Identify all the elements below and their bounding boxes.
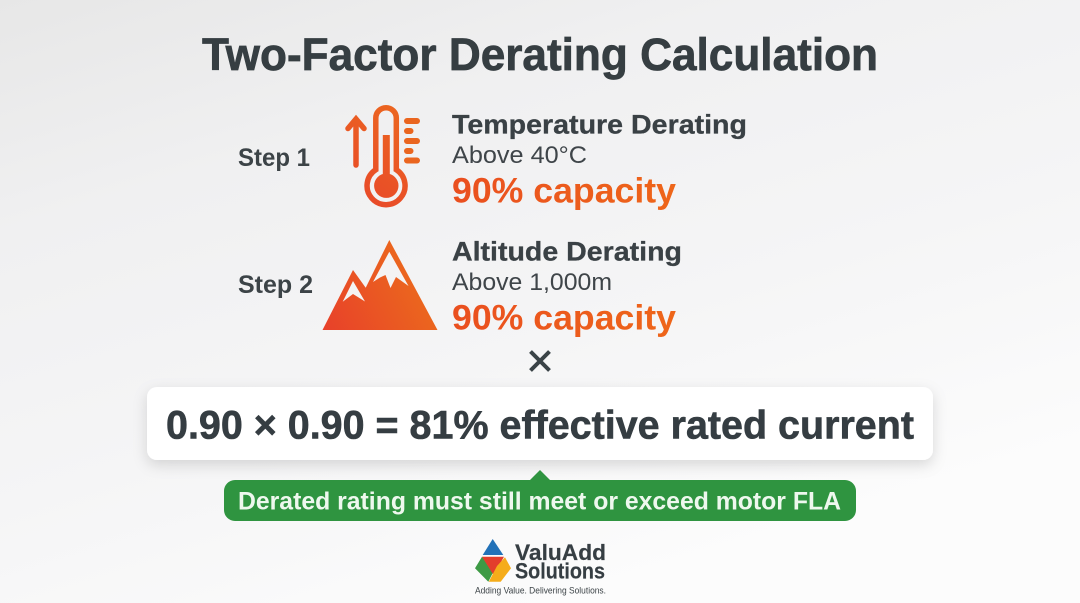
text block: altitude derating: Above 1,000m [452, 269, 612, 296]
logo: ValuAdd Solutions [475, 539, 606, 596]
icon: mountains [322, 240, 438, 330]
logo: ValuAdd Solutions: Solutions [515, 558, 605, 584]
step 2 label: Step 2 [238, 271, 313, 299]
text block: temperature derating: 90% capacity [452, 172, 677, 210]
text block: altitude derating: 90% capacity [452, 298, 677, 338]
icon: multiply sign [530, 352, 550, 370]
logo: ValuAdd Solutions: ValuAdd [515, 540, 606, 565]
icon: logo mark [475, 539, 511, 582]
step 1 label: Step 1 [238, 144, 310, 172]
green callout: Derated rating must still meet or exceed motor FLA [238, 488, 841, 516]
green callout [224, 470, 856, 521]
icon: thermometer with up arrow [348, 108, 417, 205]
result card: 0.90 × 0.90 = 81% effective rated current [166, 404, 914, 448]
title: Two-Factor Derating Calculation [202, 29, 878, 80]
text block: temperature derating [452, 110, 747, 210]
text block: altitude derating: Altitude Derating [452, 236, 682, 266]
text block: altitude derating [452, 236, 682, 338]
text block: temperature derating: Above 40°C [452, 142, 587, 169]
text block: temperature derating: Temperature Derating [452, 110, 747, 140]
logo: ValuAdd Solutions: Adding Value. Delivering Solutions. [475, 586, 606, 596]
result card [147, 387, 933, 460]
